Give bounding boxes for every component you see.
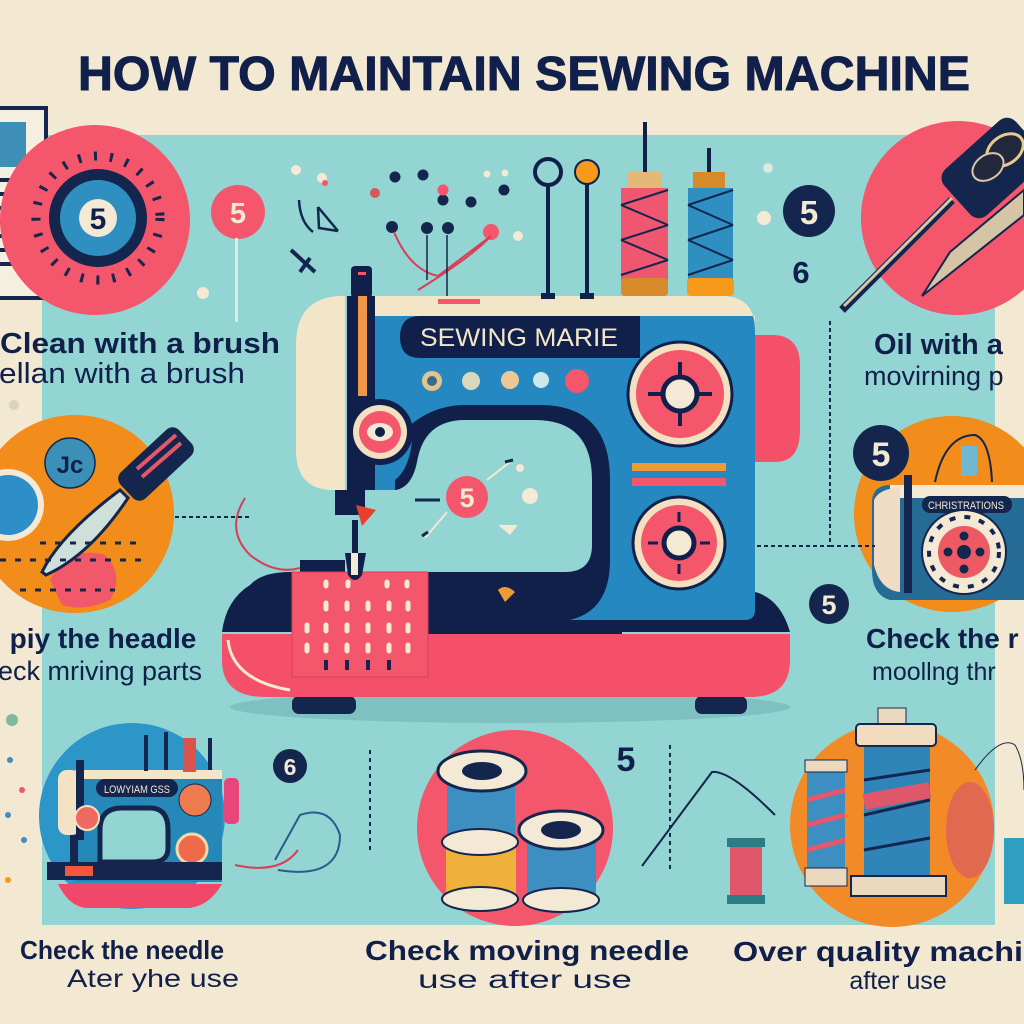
panel: check the thread: 5 [872,436,890,474]
arm opening [300,405,610,622]
panel: bobbins: Check moving needle [365,935,689,966]
number 6: 6 [792,255,810,290]
top needles and thread spools [535,122,734,299]
panel: bobbins [365,730,689,994]
left edge dots [5,400,27,883]
number 5 bottom: 5 [617,741,635,779]
panel: clean with a brush: ellan with a brush [0,358,245,390]
number badge 5 right [809,584,849,624]
panel: check the thread: Check the r [866,623,1019,654]
panel: check the thread: moollng thr [872,658,996,686]
panel: thread spools [733,708,1024,995]
nameplate [400,316,640,358]
panel: clean with a brush [0,108,280,390]
panel: check the thread: CHRISTRATIONS [928,500,1004,512]
base [222,634,790,697]
panel: small sewing machine: Check the needle [20,935,224,965]
presser foot and needle [335,490,365,515]
panel: small sewing machine: LOWYIAM GSS [104,784,170,796]
main sewing machine: SEWING MARIE [420,324,618,352]
teal background panel [42,135,995,925]
panel: the needle: Jc [57,452,83,479]
panel: oil moving parts: movirning p [864,361,1004,391]
fabric [292,572,428,677]
upper dial [628,342,732,446]
panel: small sewing machine: Ater yhe use [67,965,239,993]
pin with number 5 [211,185,265,322]
number badge 5 top right: 5 [800,194,818,231]
panel: oil moving parts: Oil with a [874,329,1004,361]
number 6 bottom left: 6 [284,754,296,780]
badge in opening [446,476,488,518]
title: HOW TO MAINTAIN SEWING MACHINE [78,48,970,101]
scattered dots and threads above machine [197,163,773,299]
panel: the needle: eck mriving parts [0,656,202,686]
panel: thread spools: Over quality machi [733,936,1023,967]
lower dial [633,497,725,589]
connector dashes and threads [175,320,875,872]
panel: oil moving parts [842,113,1024,391]
pin with number 5: 5 [230,198,246,230]
panel: bobbins: use after use [418,966,632,994]
panel: the needle [0,415,202,686]
hand wheel [755,335,800,462]
body [375,300,755,620]
number badge 5 top right [783,185,835,237]
needle bar [355,330,375,490]
panel: clean with a brush: 5 [90,203,106,236]
main sewing machine: 5 [459,483,475,513]
small thread spool [727,838,765,904]
panel: clean with a brush: Clean with a brush [0,328,280,360]
panel: check the thread [853,416,1024,686]
main sewing machine [222,266,800,723]
number 6 bottom left [273,749,307,783]
panel: small sewing machine [20,723,239,993]
number badge 5 right: 5 [821,590,837,620]
panel: thread spools: after use [849,967,947,995]
panel: the needle: piy the headle [10,623,196,654]
